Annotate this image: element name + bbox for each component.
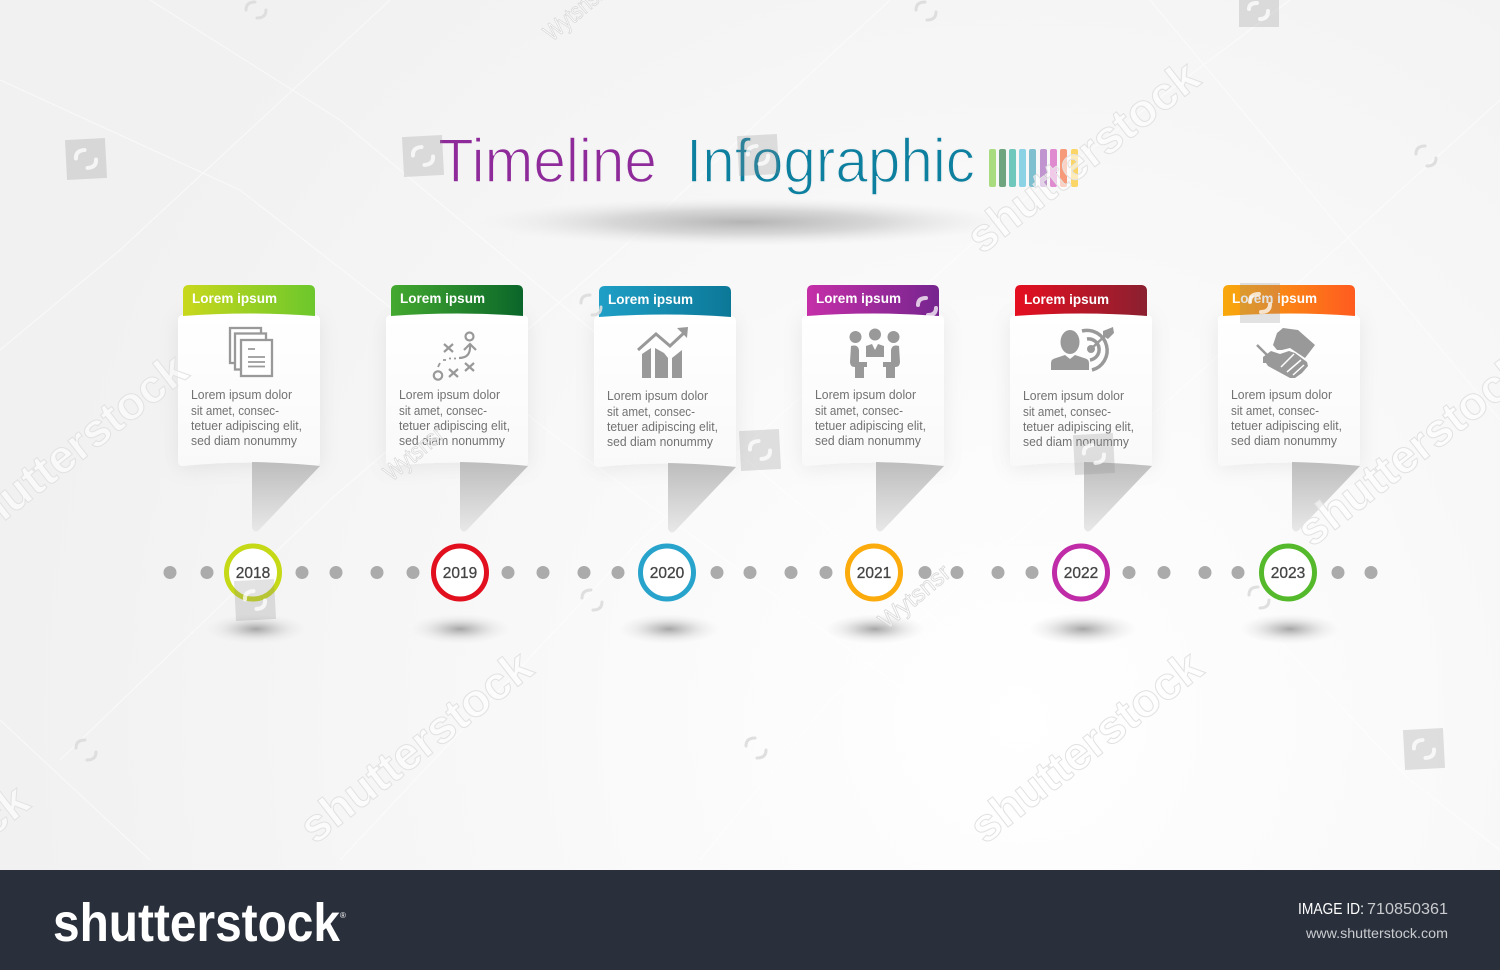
pointer 2023 — [1292, 462, 1360, 532]
text 2022: sed diam nonummy — [1023, 435, 1130, 449]
year badge 2021 — [848, 546, 900, 599]
footer url: www.shutterstock.com — [1305, 925, 1448, 941]
year badge 2023 — [1262, 546, 1314, 599]
header 2023: Lorem ipsum — [1232, 291, 1317, 306]
text 2022: sit amet, consec- — [1023, 405, 1111, 419]
shadow 2022 — [1029, 613, 1137, 645]
text 2018: Lorem ipsum dolor — [191, 388, 292, 402]
title — [438, 127, 975, 196]
footer image id: 710850361 — [1367, 901, 1448, 918]
year badge 2022 — [1054, 546, 1108, 599]
year badge 2019 — [434, 546, 486, 599]
pointer 2021 — [876, 462, 944, 532]
year badge 2020 — [640, 546, 694, 599]
text 2021: Lorem ipsum dolor — [815, 388, 916, 402]
text 2020: sit amet, consec- — [607, 405, 695, 419]
text 2023: Lorem ipsum dolor — [1231, 388, 1332, 402]
header 2022: Lorem ipsum — [1024, 292, 1109, 307]
header 2018: Lorem ipsum — [192, 291, 277, 306]
year badge 2020: 2020 — [650, 565, 685, 582]
header 2020: Lorem ipsum — [608, 292, 693, 307]
text 2018: tetuer adipiscing elit, — [191, 419, 302, 433]
icon: documents — [230, 328, 272, 376]
text 2019 — [399, 388, 510, 448]
pointer 2022 — [1084, 462, 1152, 532]
stock watermark text: shutterstock — [959, 639, 1212, 853]
text 2018 — [191, 388, 302, 448]
text 2018: sed diam nonummy — [191, 434, 298, 448]
year badge 2022: 2022 — [1064, 565, 1098, 582]
text 2021 — [815, 388, 926, 448]
text 2021: tetuer adipiscing elit, — [815, 419, 926, 433]
panel: 2020 — [594, 286, 736, 644]
icon: target and person — [1051, 327, 1114, 370]
text 2023: sed diam nonummy — [1231, 434, 1338, 448]
icon: handshake — [1257, 328, 1315, 378]
year badge 2019: 2019 — [443, 565, 477, 582]
panel: 2018 — [178, 285, 320, 644]
text 2019: Lorem ipsum dolor — [399, 388, 500, 402]
year badge 2018: 2018 — [236, 565, 270, 582]
header 2021: Lorem ipsum — [816, 291, 901, 306]
year badge 2018 — [226, 546, 280, 599]
stock watermark text: shutterstock — [956, 49, 1209, 263]
text 2022: tetuer adipiscing elit, — [1023, 420, 1134, 434]
footer registered mark: ® — [340, 911, 346, 920]
header 2019: Lorem ipsum — [400, 291, 485, 306]
stock watermark squares — [65, 0, 1445, 770]
text 2023: tetuer adipiscing elit, — [1231, 419, 1342, 433]
footer bar — [0, 870, 1500, 970]
icon: growth chart — [638, 327, 688, 378]
panel: 2022 — [1010, 285, 1152, 645]
stock watermark text: shutterstock — [289, 639, 542, 853]
text 2021: sed diam nonummy — [815, 434, 922, 448]
stock watermark text: Wytsnsr — [874, 559, 956, 635]
panel: 2023 — [1218, 285, 1360, 644]
panel: 2019 — [386, 285, 528, 644]
text 2019: tetuer adipiscing elit, — [399, 419, 510, 433]
text 2022: Lorem ipsum dolor — [1023, 389, 1124, 403]
pointer 2019 — [460, 462, 528, 532]
timeline dots — [164, 566, 1378, 579]
panel: 2021 — [802, 285, 944, 644]
footer image id — [1298, 901, 1448, 918]
pointer 2020 — [668, 463, 736, 533]
rainbow bars — [989, 149, 1078, 187]
text 2019: sed diam nonummy — [399, 434, 506, 448]
shadow 2018 — [206, 614, 306, 644]
text 2021: sit amet, consec- — [815, 404, 903, 418]
icon: meeting — [850, 328, 900, 378]
text 2023 — [1231, 388, 1342, 448]
text 2019: sit amet, consec- — [399, 404, 487, 418]
year badge 2021: 2021 — [857, 565, 891, 582]
year badge 2023: 2023 — [1271, 565, 1305, 582]
text 2018: sit amet, consec- — [191, 404, 279, 418]
footer logo: shutterstock — [53, 893, 341, 953]
text 2020: Lorem ipsum dolor — [607, 389, 708, 403]
text 2023: sit amet, consec- — [1231, 404, 1319, 418]
text 2020: sed diam nonummy — [607, 435, 714, 449]
stock watermark text: Wytsnsr — [379, 421, 449, 487]
pointer 2018 — [252, 462, 320, 532]
footer image id: IMAGE ID: — [1298, 901, 1364, 918]
title word: Timeline: Timeline — [438, 127, 657, 196]
shadow 2019 — [410, 614, 510, 644]
shadow 2020 — [619, 614, 719, 644]
title shadow — [480, 198, 1010, 246]
text 2022 — [1023, 389, 1134, 449]
icon: strategy play — [434, 332, 476, 380]
text 2020: tetuer adipiscing elit, — [607, 420, 718, 434]
title word: Infographic: Infographic — [686, 127, 975, 196]
shadow 2021 — [825, 614, 925, 644]
text 2020 — [607, 389, 718, 449]
shadow 2023 — [1240, 614, 1340, 644]
